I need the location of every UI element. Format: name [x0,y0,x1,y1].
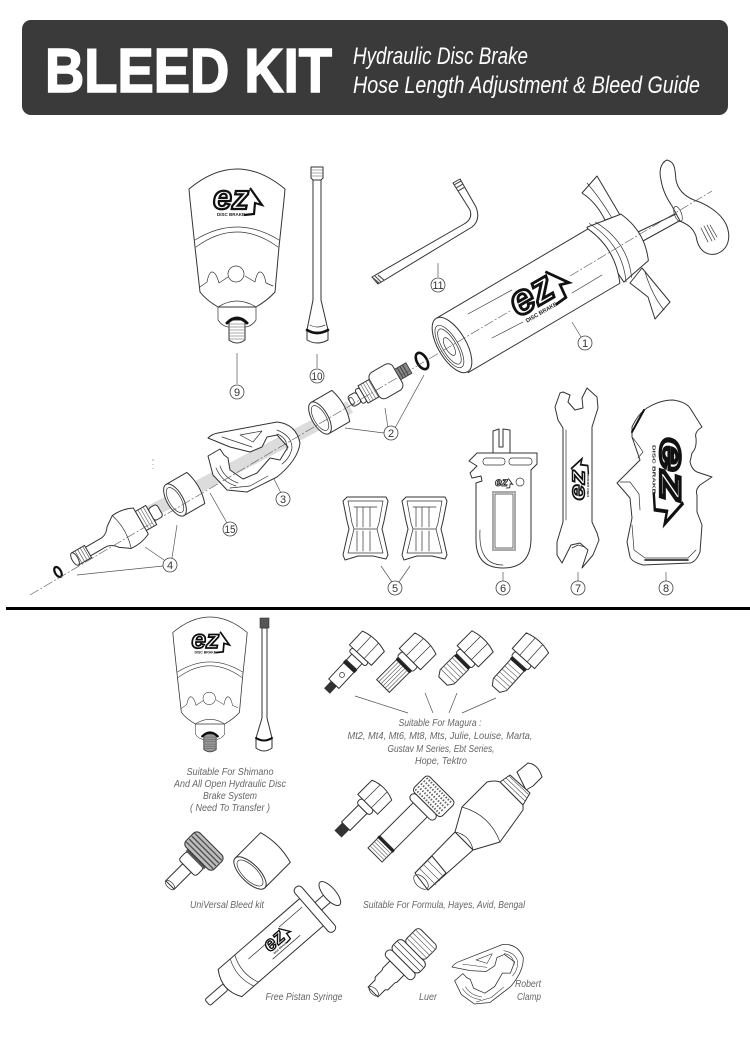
number callouts: 9 [234,387,240,399]
divider [6,607,750,610]
caption: Magura: Gustav M Series, Ebt Series, [388,743,494,755]
logo: ez on syringe: ez [500,263,562,326]
part 5: brake pads spacers [343,497,447,560]
caption: Formula: Suitable For Formula, Hayes, Avid, Bengal [363,899,526,911]
logo: ez on multi tool: DISC BRAKE [651,445,656,495]
grey axis band [150,407,350,512]
number callouts [163,278,673,595]
part 1: syringe [422,160,729,381]
caption: Robert Clamp: Robert [515,978,542,990]
syringe handle [660,160,729,254]
logo: ez on small syringe: DISC BRAKE [272,941,288,955]
logo: ez small: ez [495,475,509,489]
number callouts: 3 [280,494,286,506]
caption: Luer: Luer [419,991,437,1003]
number callouts: 8 [663,583,669,595]
number callouts: 2 [388,428,394,440]
part 7: wrench [555,388,599,568]
leader lines [77,263,666,582]
Formula adapter small [328,778,394,844]
number callouts: 11 [432,280,444,292]
Magura adapter 4 [485,631,550,699]
syringe plunger rod [638,213,681,241]
luer fitting [358,923,442,1007]
part 2: upper sleeve [304,389,352,438]
caption: Shimano: ( Need To Transfer ) [190,802,270,814]
Magura pointer lines [355,693,496,713]
caption: Shimano: Brake System [203,790,257,802]
part 10: bleed tube [307,167,328,343]
part 8: multi tool [617,400,712,565]
panel: compatibility guide [154,617,550,1025]
part 4: lower fitting [63,493,169,577]
universal sleeve [229,831,292,894]
number callouts: 4 [167,560,173,572]
number callouts: 1 [582,338,588,350]
cup and tube for Shimano: DISC BRAKE [195,650,217,654]
part 2: upper fitting [342,355,416,415]
number callouts: 10 [312,371,322,383]
caption: Magura: Mt2, Mt4, Mt6, Mt8, Mts, Julie, Louise, Marta, [348,730,532,742]
Magura adapter 3 [432,629,495,692]
subtitle: Hydraulic Disc Brake [353,43,528,70]
panel: exploded kit diagram [30,160,729,595]
axis dash-dot line [30,191,712,595]
part 11: hex key [372,179,478,284]
part 3: robert clamp [208,422,300,492]
Formula adapter knurled [361,774,456,869]
number callouts: 6 [500,583,506,595]
caption: Magura: Suitable For Magura : [398,717,482,729]
number callouts: 5 [392,583,398,595]
part 2: o-ring [413,351,431,371]
cup and tube for Shimano [173,617,272,752]
number callouts: 15 [224,524,236,536]
logo: ez on syringe: DISC BRAKE [525,302,559,324]
header banner [22,20,728,115]
part 6: bleed block tool [469,429,537,568]
logo: ez on wrench: DISC BRAKE [587,472,590,497]
caption: Universal: UniVersal Bleed kit [190,899,265,911]
logo: ez on small syringe: ez [259,925,290,956]
caption: Magura: Hope, Tektro [415,755,467,767]
universal fitting [154,830,225,901]
Formula adapter large [411,763,542,892]
logo: ez: DISC BRAKE [217,212,245,217]
part 4: small o-ring [53,566,63,578]
Magura adapter 1 [316,629,386,701]
free piston syringe [188,869,355,1025]
logo: ez on multi tool: ez [652,438,694,501]
title: BLEED KIT [45,37,332,106]
number callouts: 7 [575,583,581,595]
caption: Robert Clamp: Clamp [517,991,541,1003]
part 15: lower sleeve [159,471,207,520]
part 9: bleed cup [189,169,285,343]
caption: Syringe: Free Pistan Syringe [266,991,343,1003]
syringe wings [582,176,620,220]
logo: ez on wrench: ez [566,470,590,500]
caption: Shimano: Suitable For Shimano [186,766,274,778]
Magura adapter 2 [372,631,438,697]
cup and tube for Shimano: ez [191,624,219,654]
robert clamp small [450,941,530,1008]
syringe barrel [422,204,657,381]
caption: Shimano: And All Open Hydraulic Disc [173,778,287,790]
logo: ez: ez [213,179,249,217]
